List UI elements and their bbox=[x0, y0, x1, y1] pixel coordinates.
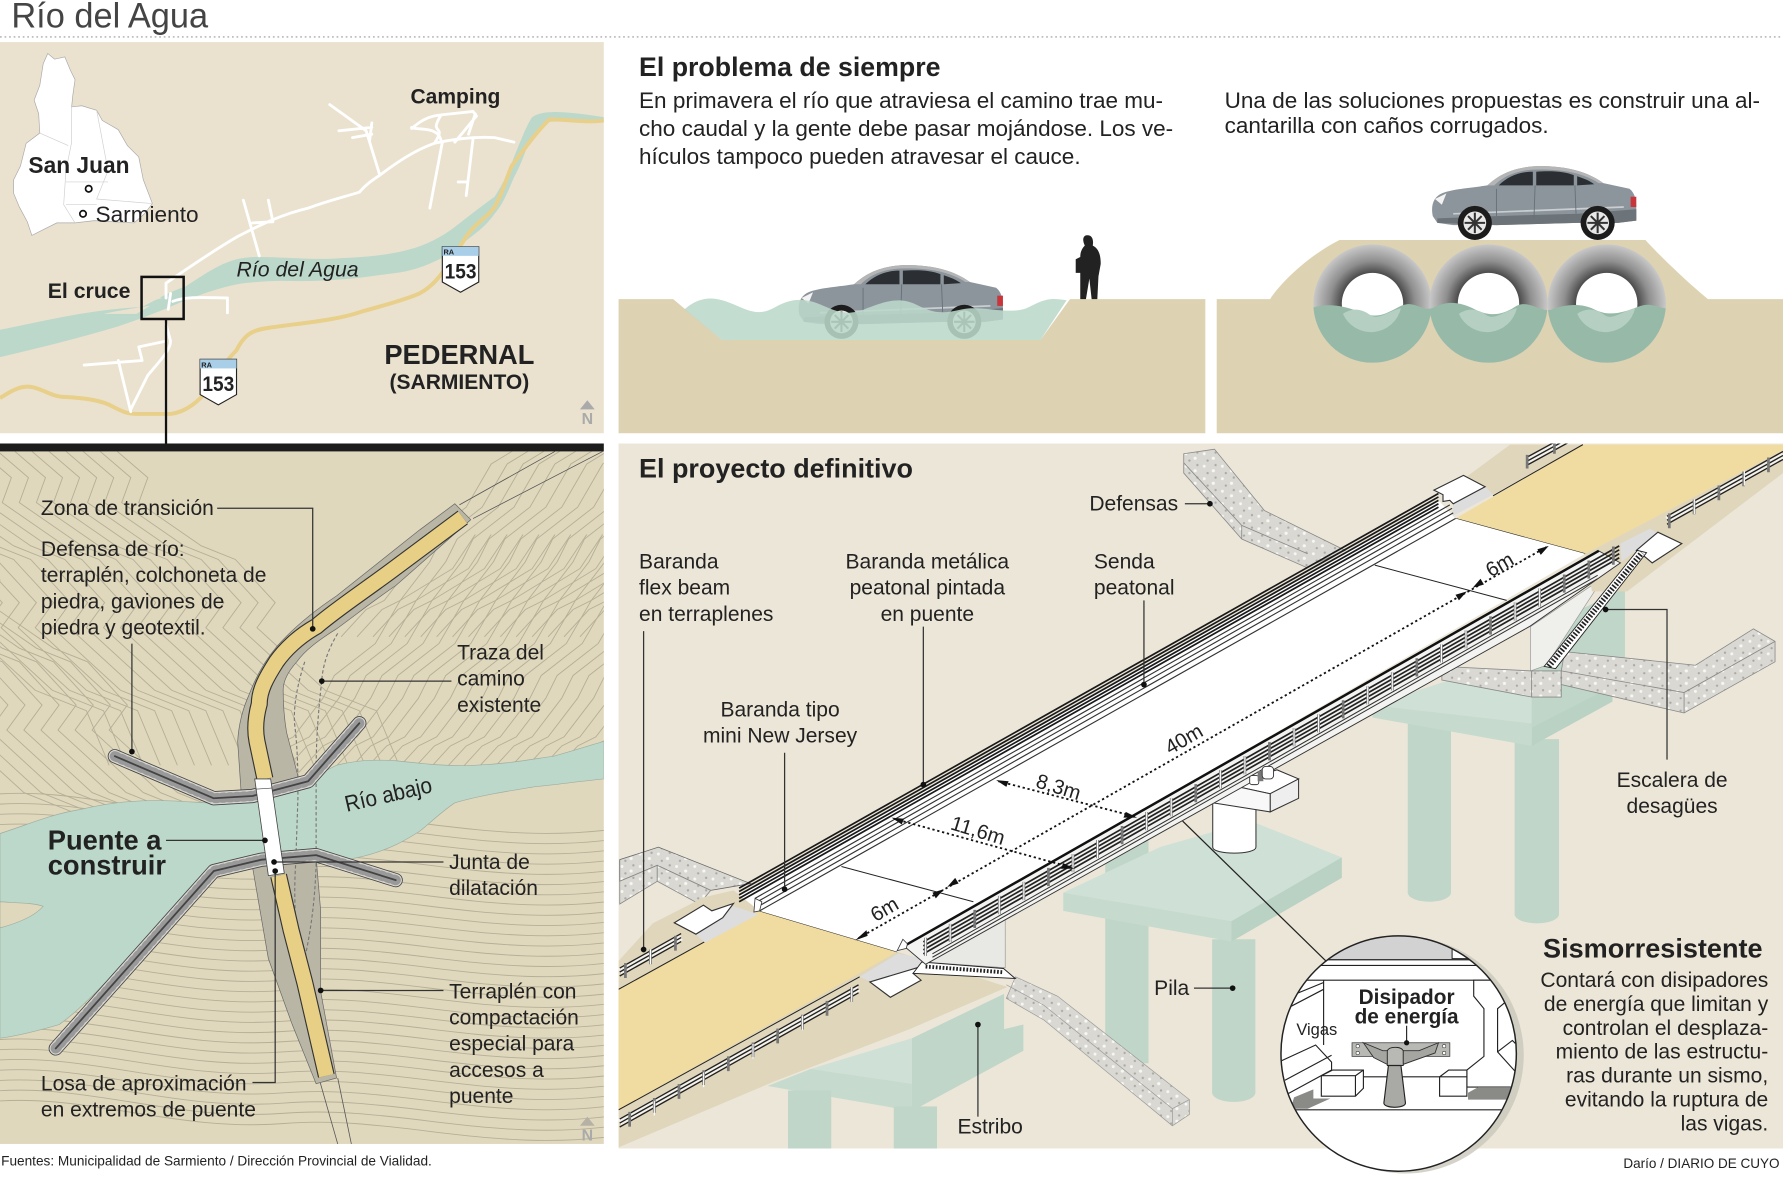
leader: Baranda metálica: peatonal pintada bbox=[850, 577, 1005, 600]
leader: Zona de transición: Zona de transición bbox=[41, 497, 214, 520]
pier: central bbox=[1063, 821, 1342, 1102]
icon: north arrow map: N bbox=[582, 411, 593, 428]
map label: Pedernal: (SARMIENTO) bbox=[390, 371, 529, 394]
text: proposed solution bbox=[1225, 88, 1760, 138]
leader: Terraplén con compactación bbox=[318, 980, 579, 1108]
leader: Puente a construir bbox=[48, 824, 268, 880]
leader: Terraplén con compactación: compactación bbox=[449, 1007, 579, 1030]
leader: Puente a construir: construir bbox=[48, 849, 166, 880]
river defense: lower center bbox=[1006, 977, 1189, 1126]
person silhouette bbox=[1076, 235, 1101, 299]
leader: Traza del camino existente: camino bbox=[457, 668, 525, 691]
existing road traces beyond works bbox=[320, 451, 603, 1144]
lower girder and rail bbox=[897, 546, 1620, 964]
leader: Junta de dilatación: dilatación bbox=[449, 877, 538, 900]
text: Defensa de río: piedra y geotextil. bbox=[41, 617, 206, 640]
text: Sismorresistente: las vigas. bbox=[1681, 1112, 1768, 1135]
yellow road lower bbox=[279, 876, 326, 1076]
black divider bar bbox=[0, 443, 604, 451]
river defenses bbox=[56, 723, 396, 1048]
slab and drain box at left near end bbox=[860, 953, 923, 997]
leader: Baranda flex beam: Baranda bbox=[639, 551, 719, 574]
text: Sismorresistente: de energía que limitan y bbox=[1544, 993, 1769, 1016]
icon: route 153 shield west: 153 bbox=[202, 371, 234, 396]
river in plan bbox=[0, 741, 604, 1038]
leader to detail bbox=[1183, 821, 1327, 962]
islands in river bbox=[104, 298, 162, 314]
water in pipes bbox=[1314, 302, 1666, 363]
text: Sismorresistente: controlan el desplaza- bbox=[1563, 1017, 1768, 1040]
lower terraplen bbox=[252, 857, 337, 1084]
map label: El cruce: El cruce bbox=[48, 279, 131, 303]
leader: Senda peatonal bbox=[1094, 551, 1175, 687]
embankment right bbox=[1467, 445, 1783, 591]
text: Sismorresistente: evitando la ruptura de bbox=[1565, 1088, 1768, 1111]
leader: Escalera de desagües: desagües bbox=[1627, 795, 1718, 818]
label: Río abajo: Río abajo bbox=[342, 772, 434, 817]
corrugated pipes bbox=[1313, 244, 1666, 363]
leader: Baranda metálica: Baranda metálica bbox=[846, 551, 1009, 574]
text: problem description: En primavera el río que atraviesa el camino trae mu- bbox=[639, 88, 1163, 113]
river defense: right bbox=[1442, 629, 1775, 713]
leader: Baranda tipo mini New Jersey bbox=[703, 698, 858, 892]
bridge deck in plan bbox=[255, 779, 284, 876]
yellow highway bbox=[0, 119, 604, 414]
approach road yellow left bbox=[619, 911, 897, 1110]
approach road yellow right bbox=[1456, 445, 1783, 554]
pier: right bbox=[1373, 578, 1625, 923]
text: Defensa de río: piedra, gaviones de bbox=[41, 590, 224, 613]
leader: Baranda flex beam bbox=[639, 551, 773, 952]
leader: Junta de dilatación: Junta de bbox=[449, 851, 530, 874]
stair drain right bbox=[1544, 550, 1647, 669]
leader: Terraplén con compactación: Terraplén con bbox=[449, 980, 577, 1003]
text: problem description bbox=[639, 88, 1173, 169]
abutment left bbox=[768, 910, 1023, 1149]
leader: Losa de aproximación bbox=[41, 868, 278, 1122]
leader: Traza del camino existente: Traza del bbox=[457, 642, 544, 665]
upper pedestrian rail and New Jersey barrier bbox=[739, 494, 1456, 912]
sand bar bbox=[0, 902, 43, 928]
text: Defensa de río bbox=[41, 538, 266, 754]
slab and drain box at right near end bbox=[1620, 529, 1682, 563]
leader: Traza del camino existente: existente bbox=[457, 694, 541, 717]
detail circle: energy dissipator: de energía bbox=[1355, 1005, 1459, 1028]
inset map: San Juan province bbox=[14, 53, 152, 235]
leader: Zona de transición bbox=[41, 497, 316, 632]
detail circle: energy dissipator: Vigas bbox=[1296, 1021, 1337, 1039]
text: Sismorresistente: miento de las estructu- bbox=[1556, 1041, 1768, 1064]
car on road bbox=[1432, 166, 1636, 240]
river on map bbox=[0, 112, 604, 357]
deck joint lines bbox=[841, 565, 1507, 902]
map label: Sarmiento: Sarmiento bbox=[96, 202, 199, 227]
text: Sismorresistente: Contará con disipadores bbox=[1540, 969, 1768, 992]
stair drain left bbox=[913, 962, 1015, 979]
dimension lines bbox=[855, 546, 1549, 940]
icon: north arrow plan: N bbox=[582, 1128, 593, 1145]
slab and drain box at left far end bbox=[674, 903, 758, 943]
leader: Baranda flex beam: flex beam bbox=[639, 577, 730, 600]
dimension label 6m left: 6m bbox=[867, 892, 903, 927]
locator box: El cruce bbox=[142, 277, 184, 445]
icon: route 153 shield east bbox=[442, 247, 479, 292]
source note: Fuentes: Municipalidad de Sarmiento / Dirección Provincial de Vialidad. bbox=[1, 1154, 432, 1169]
leader: Losa de aproximación: en extremos de puente bbox=[41, 1099, 256, 1122]
icon: route 153 shield west bbox=[200, 359, 237, 405]
text: Sismorresistente: Sismorresistente bbox=[1543, 933, 1763, 963]
yellow road upper bbox=[256, 517, 463, 779]
icon: north arrow map bbox=[580, 400, 595, 428]
embankment left bbox=[619, 890, 1007, 1147]
leader: Senda peatonal: Senda bbox=[1094, 551, 1155, 574]
credit: Darío / DIARIO DE CUYO bbox=[1623, 1156, 1780, 1171]
leader: Estribo bbox=[957, 1022, 1023, 1139]
leader: Escalera de desagües: Escalera de bbox=[1617, 769, 1728, 792]
heading: El proyecto definitivo: El proyecto definitivo bbox=[639, 454, 913, 484]
leader: Baranda metálica: en puente bbox=[881, 603, 974, 626]
white local roads bbox=[84, 105, 514, 412]
heading: El problema de siempre: El problema de siempre bbox=[639, 52, 940, 82]
leader: Junta de dilatación bbox=[271, 851, 538, 900]
panel: location map bbox=[0, 42, 604, 445]
icon: route 153 shield east: 153 bbox=[445, 259, 476, 284]
leader: Baranda metálica bbox=[846, 551, 1009, 787]
icon: route 153 shield west: RA bbox=[201, 360, 213, 369]
bridge deck bbox=[760, 519, 1585, 952]
text: Defensa de río: Defensa de río: bbox=[41, 538, 185, 561]
leader: Baranda flex beam: en terraplenes bbox=[639, 603, 773, 626]
map label: Camping: Camping bbox=[410, 85, 500, 108]
contour lines bbox=[0, 452, 604, 1141]
existing road dashed bbox=[294, 633, 338, 967]
floodwater bbox=[685, 299, 1067, 340]
text: problem description: cho caudal y la gente debe pasar mojándose. Los ve- bbox=[639, 116, 1173, 141]
dimension label 40m: 40m bbox=[1161, 720, 1207, 759]
text: problem description: hículos tampoco pueden atravesar el cauce. bbox=[639, 144, 1081, 169]
map label: Río del Agua: Río del Agua bbox=[237, 257, 359, 281]
panel: definitive project bridge bbox=[619, 431, 1783, 1149]
leader: Terraplén con compactación: puente bbox=[449, 1085, 513, 1108]
leader: Senda peatonal: peatonal bbox=[1094, 577, 1175, 600]
map label: Pedernal bbox=[384, 339, 534, 394]
bearing block on pier bbox=[1213, 770, 1299, 853]
text: proposed solution: Una de las soluciones propuestas es construir una al- bbox=[1225, 88, 1760, 113]
icon: north arrow plan bbox=[580, 1117, 595, 1145]
panel: flooded ford cross-section bbox=[619, 235, 1205, 433]
map label: San Juan: San Juan bbox=[28, 152, 130, 178]
panel: culvert cross-section bbox=[1217, 166, 1783, 433]
leader: Puente a construir: Puente a bbox=[48, 824, 162, 855]
fences on embankments bbox=[620, 431, 1783, 1127]
panel: bridge location plan bbox=[0, 451, 604, 1144]
dimension label 8,3m: 8,3m bbox=[1033, 770, 1084, 805]
map label: Pedernal: PEDERNAL bbox=[384, 339, 534, 370]
leader: Baranda tipo mini New Jersey: Baranda tipo bbox=[720, 698, 840, 721]
icon: route 153 shield east: RA bbox=[443, 248, 455, 257]
leader: Losa de aproximación: Losa de aproximación bbox=[41, 1073, 247, 1096]
slab and drain box at right far end bbox=[1434, 475, 1493, 516]
text: Defensa de río: terraplén, colchoneta de bbox=[41, 564, 266, 587]
bearings on block bbox=[1250, 766, 1274, 785]
car in water bbox=[799, 265, 1003, 339]
dimension label 6m right: 6m bbox=[1482, 548, 1518, 582]
dimension label 11,6m: 11,6m bbox=[948, 812, 1008, 850]
leader: Terraplén con compactación: accesos a bbox=[449, 1059, 544, 1082]
leader: Escalera de desagües bbox=[1603, 607, 1728, 818]
leader: Pila bbox=[1154, 977, 1235, 1000]
leader: Pila: Pila bbox=[1154, 977, 1190, 1000]
upper terraplen bbox=[238, 504, 471, 791]
river defense: upper bbox=[1184, 449, 1345, 567]
detail circle: energy dissipator bbox=[1274, 927, 1529, 1174]
text: proposed solution: cantarilla con caños corrugados. bbox=[1225, 113, 1549, 138]
text: Sismorresistente bbox=[1540, 933, 1769, 1135]
river defense: lower left bbox=[620, 847, 750, 904]
leader: Traza del camino existente bbox=[319, 642, 544, 717]
leader: Terraplén con compactación: especial para bbox=[449, 1033, 574, 1056]
leader: Defensas: Defensas bbox=[1089, 493, 1178, 516]
text: Sismorresistente: ras durante un sismo, bbox=[1566, 1065, 1768, 1088]
detail circle: energy dissipator: Disipador bbox=[1359, 986, 1455, 1009]
leader: Estribo: Estribo bbox=[957, 1116, 1023, 1139]
leader: Baranda tipo mini New Jersey: mini New Jersey bbox=[703, 725, 858, 748]
